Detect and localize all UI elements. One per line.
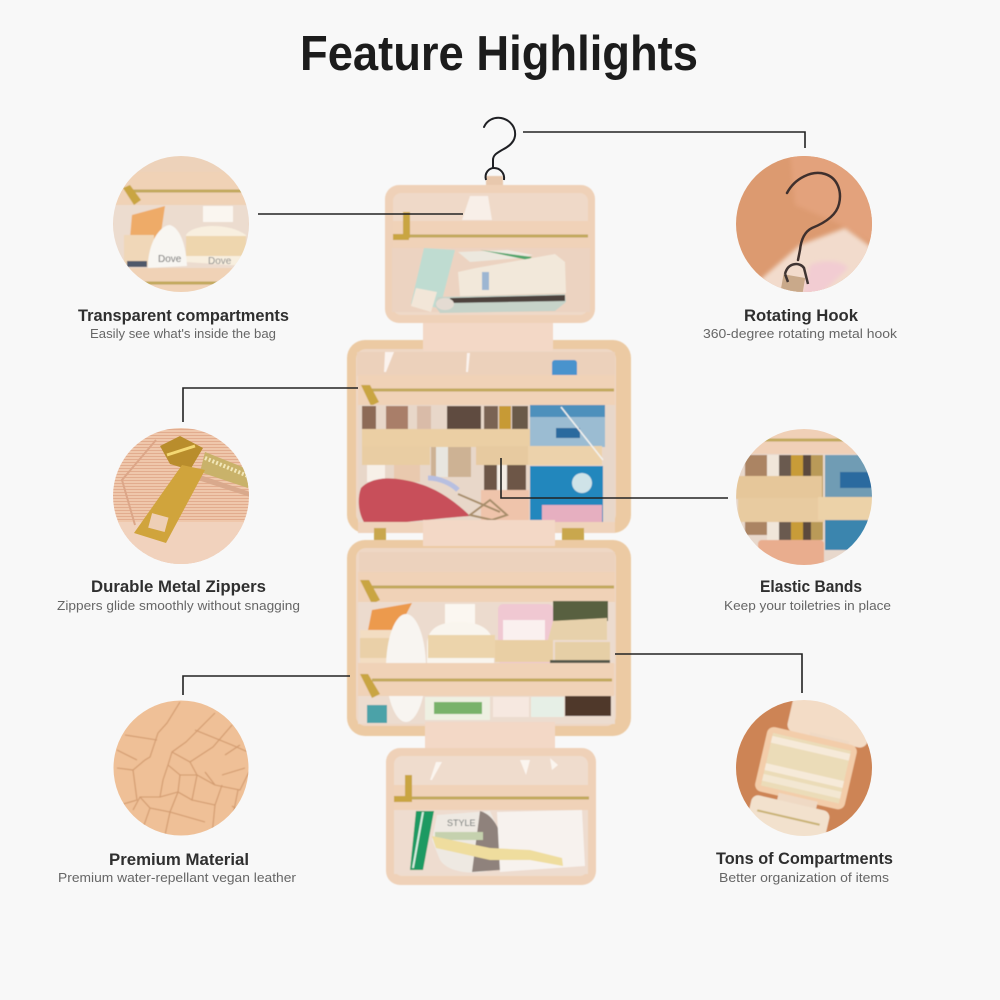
heading: Premium Material (109, 850, 249, 869)
leader lines (183, 132, 805, 695)
arrow: zippers leader (183, 388, 358, 422)
panel: premium material (58, 698, 297, 885)
image: open bag on orange background (736, 700, 872, 836)
arrow: compartments leader (615, 654, 802, 693)
arrow: material leader (183, 676, 350, 695)
image: textured vegan leather swatch (114, 700, 248, 836)
title: Feature Highlights (300, 27, 698, 81)
description: Easily see what's inside the bag (90, 326, 276, 341)
arrow: hook leader (523, 132, 805, 148)
image: transparent compartments (113, 156, 249, 292)
bottom pouch (386, 748, 596, 885)
icon: metal hanging hook (484, 118, 515, 180)
panel: durable metal zippers (57, 425, 300, 613)
middle compartment (347, 335, 631, 548)
bottom pouch: STYLE (447, 818, 476, 828)
heading: Elastic Bands (760, 577, 862, 596)
image: transparent compartments: Dove (158, 254, 182, 265)
description: Zippers glide smoothly without snagging (57, 598, 300, 613)
heading: Rotating Hook (744, 306, 859, 325)
image: hook close-up (736, 156, 872, 292)
panel: elastic bands (724, 427, 891, 613)
image: transparent compartments: Dove (208, 256, 232, 267)
description: Premium water-repellant vegan leather (58, 870, 297, 885)
description: 360-degree rotating metal hook (703, 326, 898, 341)
lower compartment (347, 532, 631, 754)
top pouch (385, 176, 595, 348)
arrow: transparent compartments leader (258, 213, 463, 215)
heading: Transparent compartments (78, 306, 289, 325)
heading: Durable Metal Zippers (91, 577, 266, 596)
description: Better organization of items (719, 870, 890, 885)
red hair brush (359, 478, 470, 525)
organizer bag photo (347, 176, 631, 885)
panel: rotating hook (703, 153, 898, 341)
description: Keep your toiletries in place (724, 598, 891, 613)
image: elastic bands close-up (733, 427, 875, 567)
panel: tons of compartments (716, 690, 893, 885)
heading: Tons of Compartments (716, 849, 893, 868)
image: gold zipper pull (113, 428, 249, 564)
arrow: elastic bands leader (501, 458, 728, 498)
panel: transparent compartments (78, 150, 289, 341)
